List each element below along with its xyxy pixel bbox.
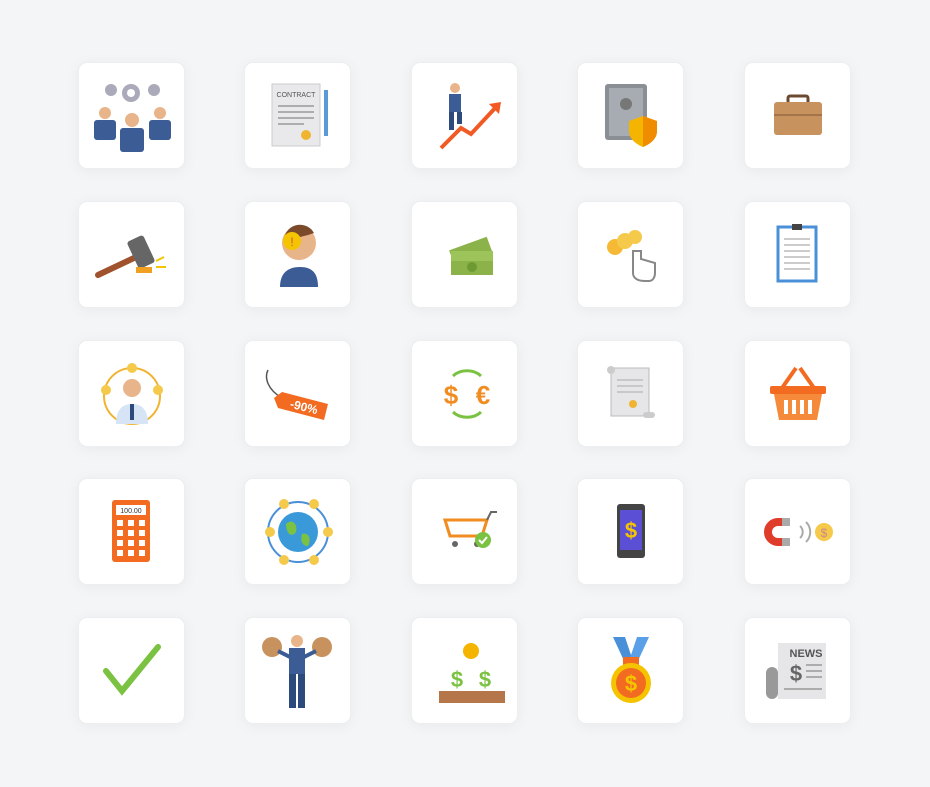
icon: idea head: ! xyxy=(290,235,294,249)
card: briefcase xyxy=(744,62,851,169)
icon: currency exchange xyxy=(444,371,490,417)
card: medal xyxy=(577,617,684,724)
icon: cart check xyxy=(445,512,497,548)
card: phone xyxy=(577,478,684,585)
icon: currency exchange: € xyxy=(476,380,490,410)
icon: phone dollar: $ xyxy=(625,518,637,543)
icon: briefcase xyxy=(774,96,822,135)
icon: clipboard xyxy=(778,224,816,281)
icon: newspaper: $ xyxy=(790,661,802,686)
icon: safe shield xyxy=(605,84,657,147)
card: checkmark xyxy=(78,617,185,724)
card: newspaper xyxy=(744,617,851,724)
card: cart xyxy=(411,478,518,585)
card: exchange xyxy=(411,340,518,447)
card: man money bags xyxy=(244,617,351,724)
icon: man with bags xyxy=(262,635,332,708)
icon: checkmark xyxy=(106,647,158,691)
card: money plants xyxy=(411,617,518,724)
icon: person with coins xyxy=(101,363,163,424)
icon: money plants: $ xyxy=(451,667,463,692)
card: contract xyxy=(244,62,351,169)
icon: money plants xyxy=(439,643,505,703)
icon: calculator: 100.00 xyxy=(120,508,142,515)
card: calculator xyxy=(78,478,185,585)
card: magnet xyxy=(744,478,851,585)
card: globe xyxy=(244,478,351,585)
icon: contract: CONTRACT xyxy=(277,92,316,99)
card: gavel xyxy=(78,201,185,308)
icon: medal: $ xyxy=(625,671,637,696)
icon: currency exchange: $ xyxy=(444,380,459,410)
icon: basket xyxy=(770,368,826,420)
icon: magnet coin: $ xyxy=(821,526,828,540)
icon: newspaper: NEWS xyxy=(790,648,822,660)
card: team gears xyxy=(78,62,185,169)
icon: globe coins xyxy=(265,499,333,565)
icon: coins hand xyxy=(607,230,655,281)
card: cash xyxy=(411,201,518,308)
card: clipboard xyxy=(744,201,851,308)
card: coin tap xyxy=(577,201,684,308)
icon: money plants: $ xyxy=(479,667,491,692)
card: basket xyxy=(744,340,851,447)
icon: cash stack xyxy=(449,237,493,275)
card: discount tag xyxy=(244,340,351,447)
icon: growth arrow xyxy=(441,83,501,148)
card: employee coins xyxy=(78,340,185,447)
icon: certificate scroll xyxy=(607,366,655,418)
card: idea head xyxy=(244,201,351,308)
icon: team gears xyxy=(94,84,171,152)
card: safe xyxy=(577,62,684,169)
card: scroll xyxy=(577,340,684,447)
icon: price tag: -90% xyxy=(289,397,320,417)
icon: gavel xyxy=(98,235,166,275)
card: growth xyxy=(411,62,518,169)
icon: newspaper xyxy=(766,643,826,699)
